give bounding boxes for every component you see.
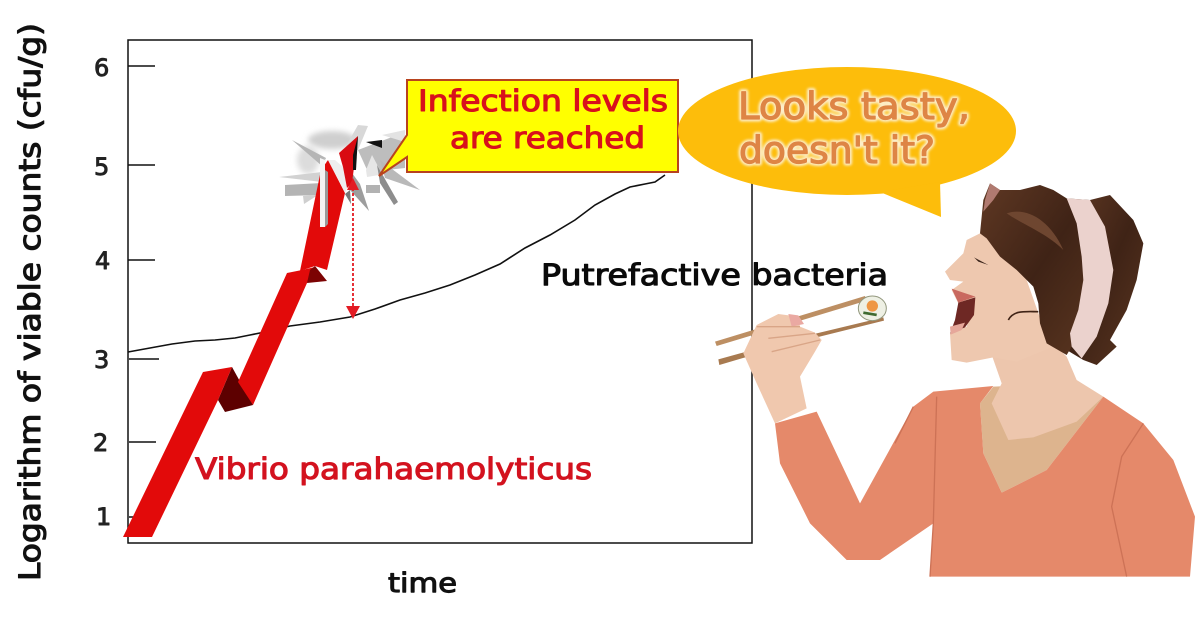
hand [743,314,822,423]
eye [974,257,988,265]
y axis title: Logarithm of viable counts (cfu/g) [13,23,47,581]
putrefactive bacteria label: Putrefactive bacteria [541,258,888,292]
speech bubble [678,67,1016,217]
back hair [1067,195,1143,365]
face [945,233,1053,363]
orange sweater [775,386,1195,577]
y axis tick labels: 3 [94,346,109,374]
y axis tick labels: 5 [94,153,109,181]
y axis tick labels [93,54,111,531]
callout: infection levels [379,80,678,176]
fingers [788,314,804,327]
chopsticks [715,296,867,346]
undershirt [980,383,1103,493]
chart frame [128,40,752,543]
earring curl [1008,312,1038,320]
speech bubble: Looks tasty, [738,85,970,128]
x axis title: time [388,568,457,599]
speech bubble: doesn't it? [739,129,935,172]
y axis tick labels: 6 [94,54,109,82]
neck and chest [990,337,1103,440]
y axis tick labels: 4 [95,247,110,275]
y axis tick labels: 1 [96,503,111,531]
sweater seams [895,397,1143,577]
pink headband [1067,198,1113,358]
callout: infection levels: Infection levels [418,84,668,118]
speech bubble: doesn't it? [739,129,935,172]
double-headed dotted red arrow [346,178,360,319]
putrefactive bacteria curve [128,175,665,352]
Vibrio parahaemolyticus label: Vibrio parahaemolyticus [195,452,592,486]
explosion burst [279,125,420,211]
sushi roll [858,296,886,321]
callout: infection levels: are reached [450,121,645,155]
y axis tick labels: 2 [93,429,108,457]
Vibrio parahaemolyticus red growth arrow [123,136,358,537]
front hair [980,183,1097,355]
woman eating sushi [715,183,1195,577]
mouth [950,297,975,333]
speech bubble: Looks tasty, [738,85,970,128]
